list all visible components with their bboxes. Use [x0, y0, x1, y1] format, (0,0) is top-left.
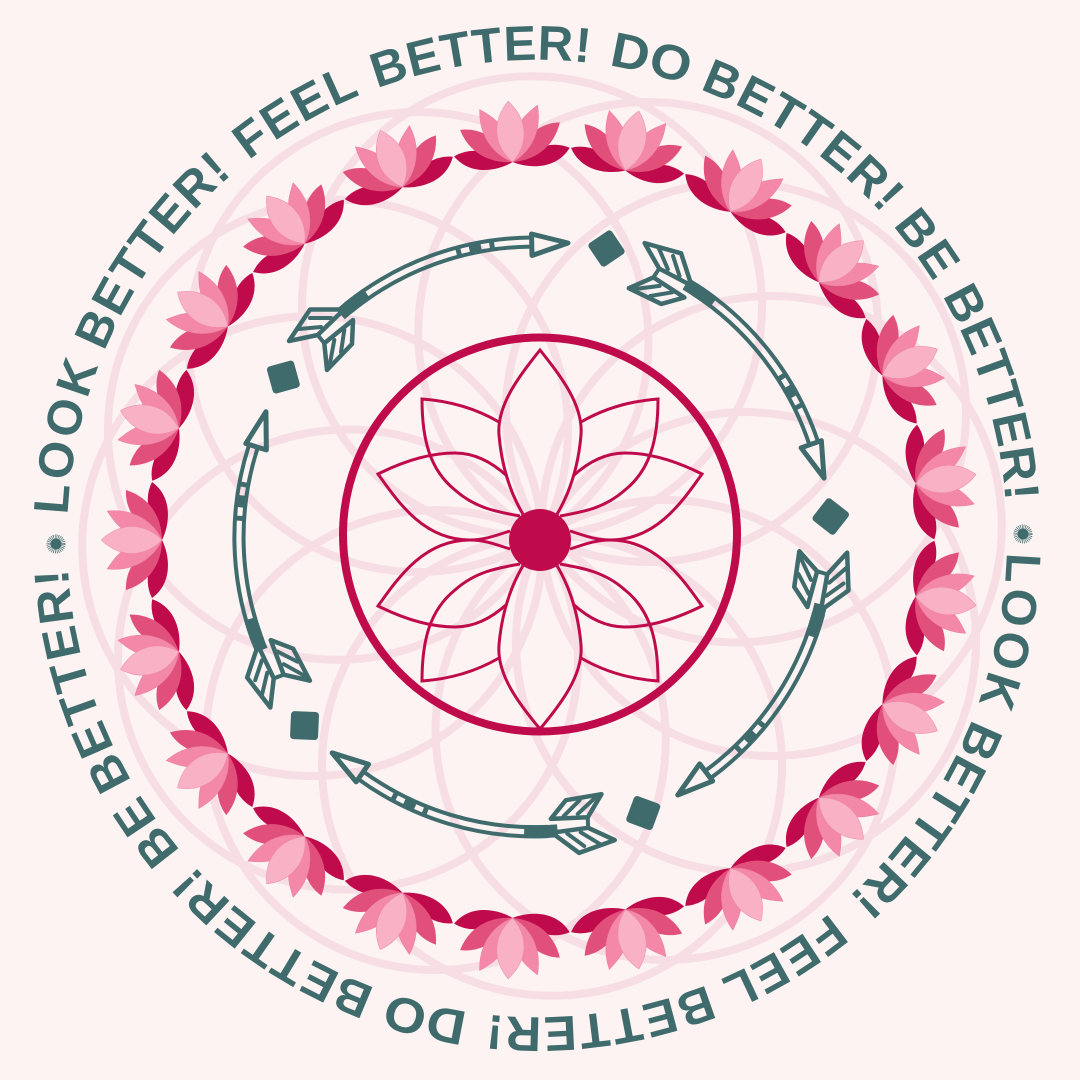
arrow and marker: right	[617, 209, 855, 573]
circular slogan text: BETTER!	[74, 152, 229, 349]
arrow and marker: top	[289, 229, 626, 370]
arrow and marker: left	[164, 352, 405, 717]
circular slogan text: FEEL	[722, 915, 848, 1002]
circular slogan text: BETTER!	[34, 573, 130, 794]
flower centre disc	[509, 509, 571, 571]
central flower emblem	[343, 338, 737, 732]
lower petals	[378, 540, 702, 729]
circular slogan text: BETTER!	[370, 26, 588, 88]
ring of five arrows with square markers	[164, 209, 912, 930]
circular slogan text: BETTER!	[490, 986, 716, 1052]
circular slogan text: BE	[894, 206, 960, 280]
circular slogan text: BETTER!	[172, 869, 372, 1018]
circular slogan text: LOOK	[978, 556, 1040, 712]
circular slogan text: LOOK	[34, 356, 98, 512]
arrow and marker: bottom left	[277, 616, 632, 930]
icon: sun separator left	[48, 536, 64, 552]
icon: sun separator right	[1016, 526, 1030, 542]
ring of lotus flowers	[101, 97, 985, 983]
circular slogan text: FEEL	[231, 72, 359, 158]
circular slogan text: DO	[386, 998, 465, 1045]
circular slogan text: DO	[612, 32, 690, 80]
upper petals	[378, 350, 702, 540]
circular slogan text: BETTER!	[852, 722, 1002, 918]
circular slogan text: BETTER!	[702, 59, 904, 210]
emblem outer ring	[343, 338, 737, 732]
circular slogan text: BE	[112, 796, 178, 870]
arrow and marker: bottom right	[557, 529, 912, 840]
circular slogan text: BETTER!	[944, 282, 1039, 496]
